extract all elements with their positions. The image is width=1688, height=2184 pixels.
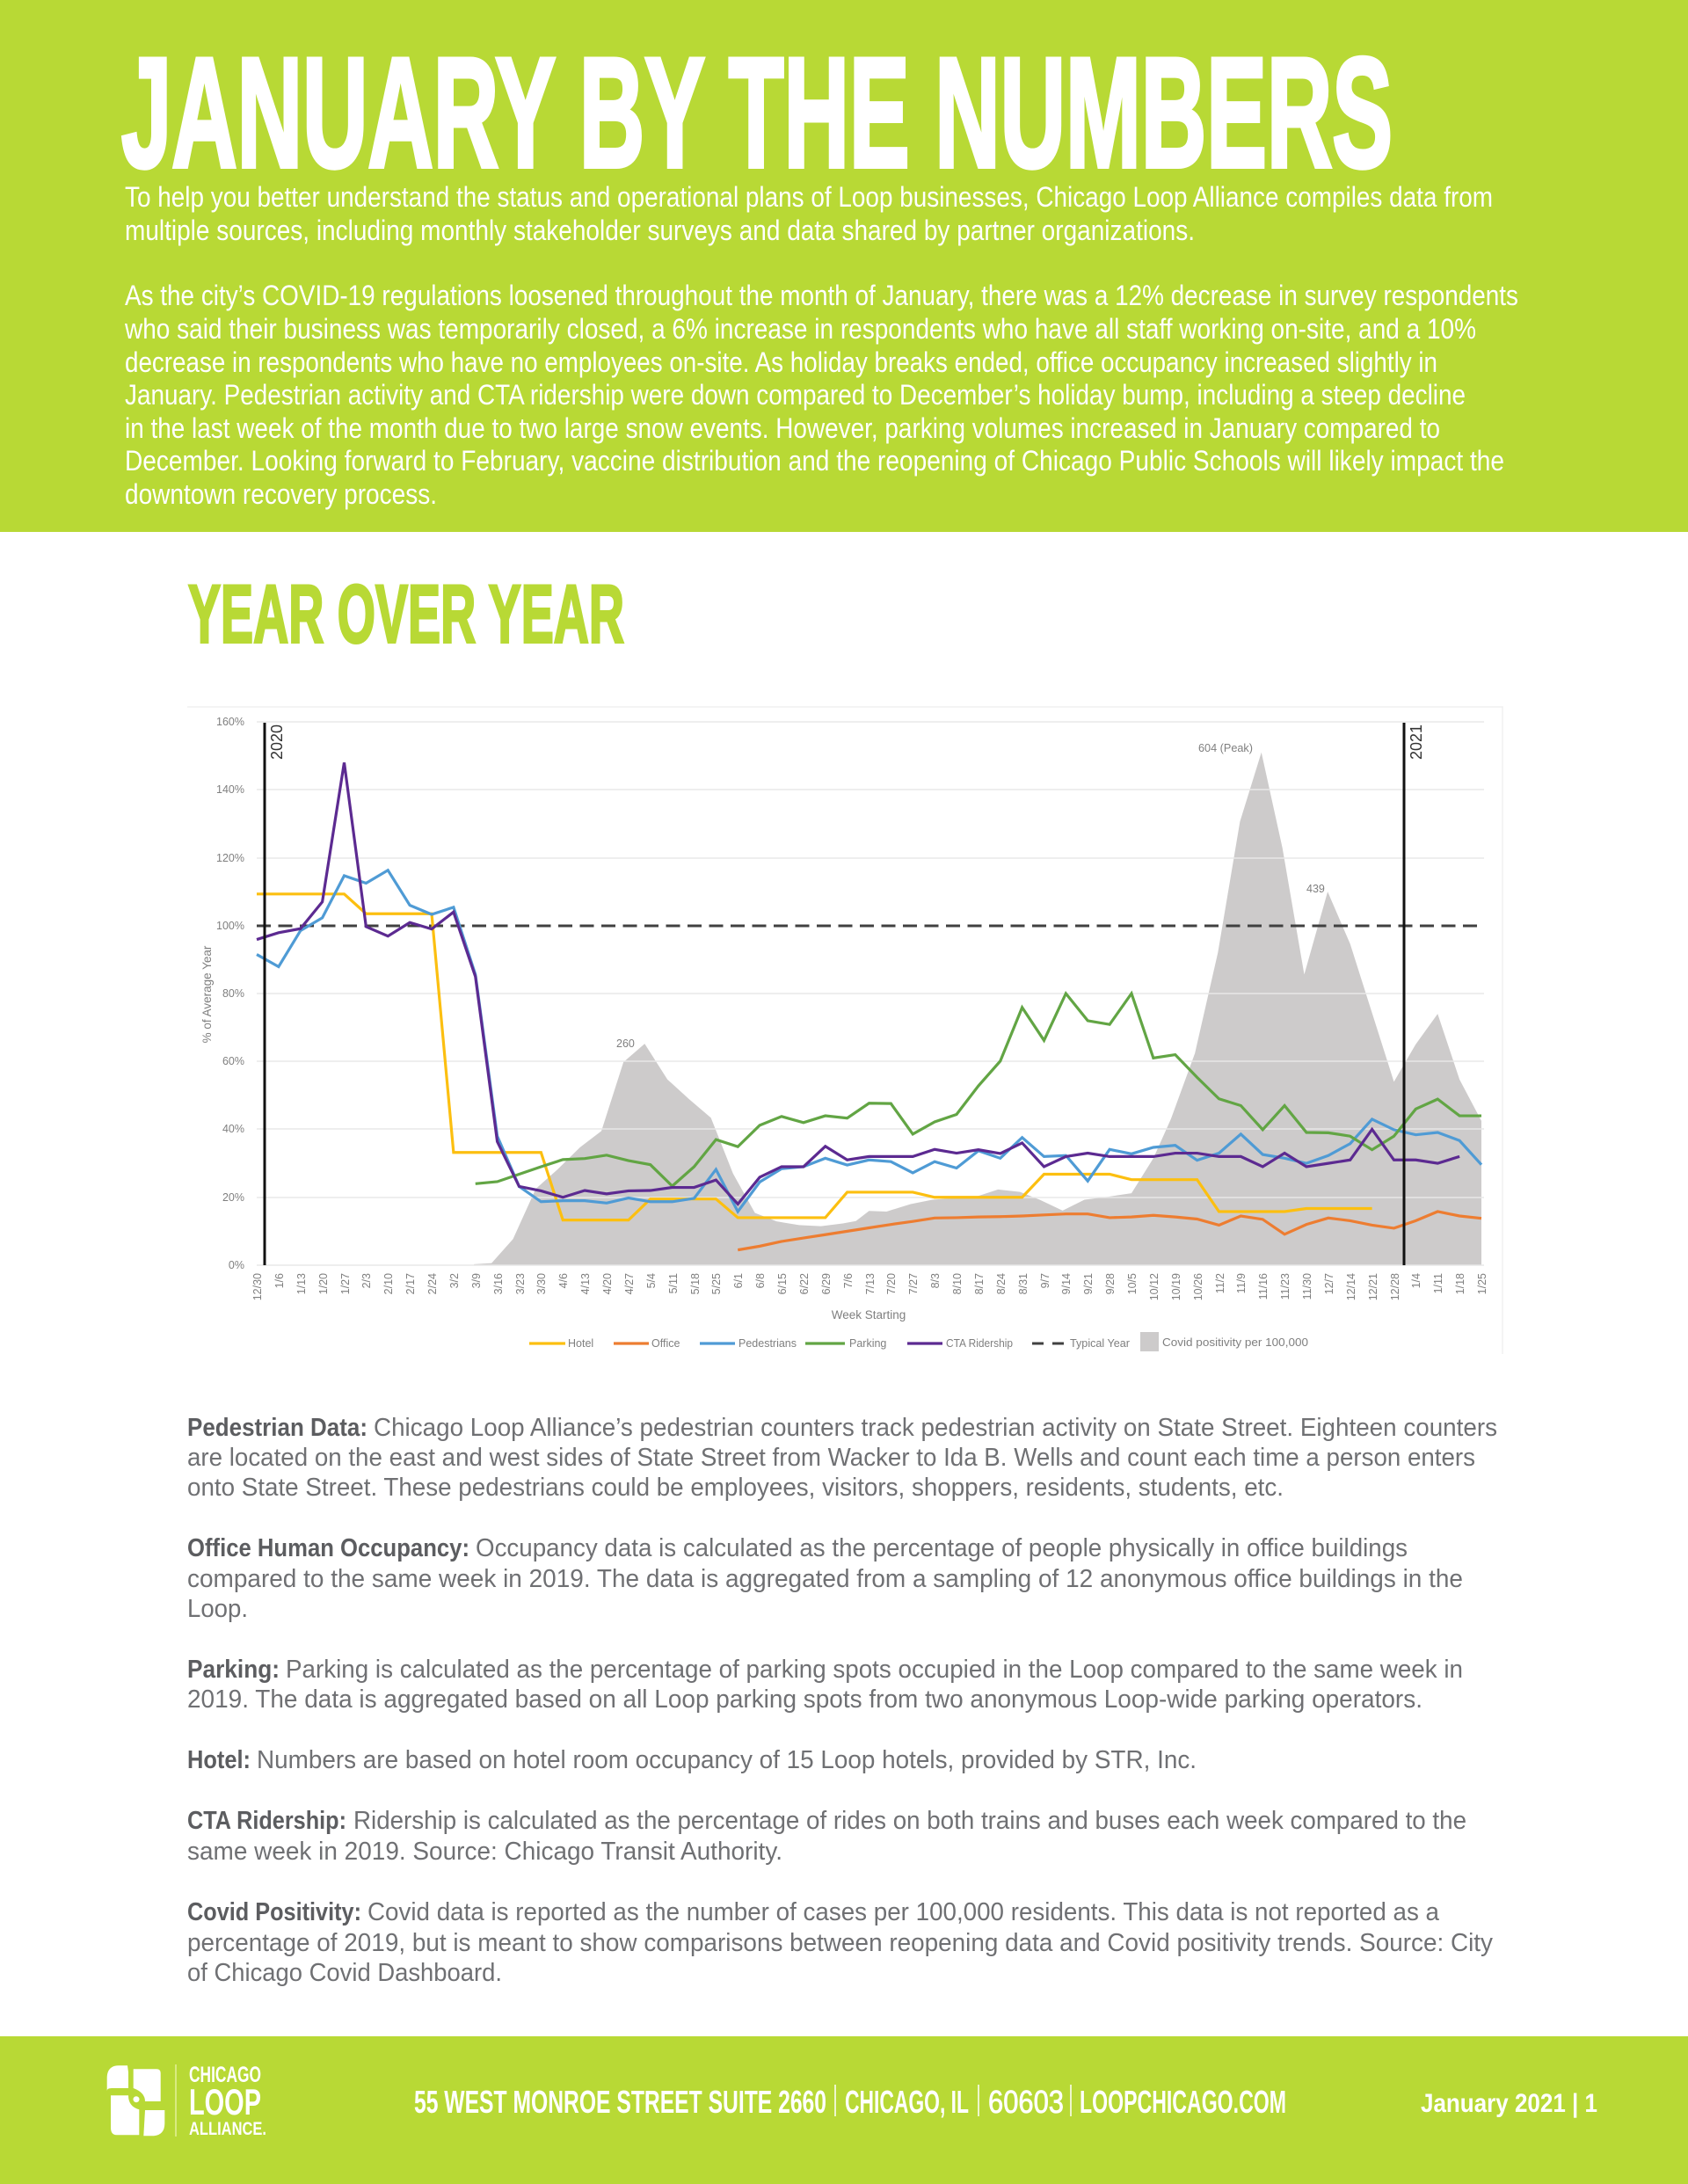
x axis labels: 11/9 <box>1235 1273 1248 1293</box>
x axis labels: 10/19 <box>1170 1273 1182 1300</box>
legend: Pedestrians <box>738 1337 797 1350</box>
page date and number: January 2021 | 1 <box>1421 2089 1597 2118</box>
note: office human occupancy: Occupancy data is calculated as the percentage of people physically in office buildings <box>476 1534 1408 1562</box>
x axis labels: 3/2 <box>448 1273 461 1288</box>
y axis labels: 140% <box>216 783 244 796</box>
note: pedestrian data <box>187 1414 1497 1502</box>
text block: introduction: multiple sources, including monthly stakeholder surveys and data shared by partner organizations. <box>125 215 1195 246</box>
note: covid positivity: of Chicago Covid Dashboard. <box>187 1959 502 1987</box>
x axis labels: 10/12 <box>1148 1273 1160 1300</box>
x axis labels: 8/3 <box>929 1273 942 1288</box>
note: office human occupancy: Office Human Occupancy: <box>187 1534 469 1562</box>
x axis labels: 11/23 <box>1279 1273 1291 1299</box>
note: office human occupancy <box>187 1534 1463 1623</box>
x axis labels: 2/17 <box>404 1273 417 1294</box>
legend: Office <box>651 1337 680 1350</box>
text block: introduction <box>124 181 1518 510</box>
note: pedestrian data: are located on the east and west sides of State Street from Wacker to Ida B. Wells and count each time a person enters <box>187 1444 1475 1472</box>
x axis labels: 9/7 <box>1039 1273 1051 1288</box>
x axis labels: 6/22 <box>798 1273 811 1294</box>
x axis labels: 6/8 <box>754 1273 767 1288</box>
x axis labels: 1/4 <box>1410 1273 1422 1288</box>
data lines <box>257 762 1481 1250</box>
x axis labels: 7/20 <box>885 1273 898 1294</box>
note: office human occupancy: Loop. <box>187 1595 248 1623</box>
icon: chicago loop alliance logo <box>107 2065 164 2136</box>
note: pedestrian data: Chicago Loop Alliance’s pedestrian counters track pedestrian activity on State Street. Eighteen counters <box>374 1414 1497 1442</box>
y axis labels <box>216 716 244 1271</box>
annotations: covid peaks: 260 <box>616 1037 635 1050</box>
note: CTA ridership <box>187 1807 1466 1866</box>
note: hotel: Hotel: <box>187 1746 251 1774</box>
x axis labels: 1/6 <box>273 1273 286 1288</box>
line: pedestrians <box>257 870 1481 1212</box>
legend: CTA Ridership <box>946 1337 1013 1350</box>
footer address: LOOPCHICAGO.COM <box>1080 2084 1286 2120</box>
x axis labels: 10/5 <box>1126 1273 1139 1294</box>
x axis labels: 1/27 <box>339 1273 352 1294</box>
note: pedestrian data: Pedestrian Data: <box>187 1414 367 1442</box>
x axis labels: 1/11 <box>1432 1273 1444 1293</box>
x axis labels: 8/31 <box>1017 1273 1030 1294</box>
line: hotel <box>257 894 1372 1220</box>
y axis labels: 60% <box>222 1055 244 1067</box>
x axis labels: 4/13 <box>579 1273 592 1294</box>
y axis labels: 100% <box>216 920 244 932</box>
text block: introduction: downtown recovery process. <box>125 478 437 510</box>
text block: introduction: To help you better understand the status and operational plans of Loop businesses, Chicago Loop Alliance compiles data from <box>125 181 1493 213</box>
x axis labels: 3/16 <box>492 1273 505 1294</box>
text block: introduction: December. Looking forward to February, vaccine distribution and the reopening of Chicago Public Schools will likely impact the <box>125 445 1504 477</box>
x axis labels: 12/21 <box>1367 1273 1379 1300</box>
x axis labels: 2/24 <box>426 1273 439 1294</box>
year marker: 2020: 2020 <box>268 724 286 760</box>
annotations: covid peaks <box>616 742 1325 1050</box>
note: CTA ridership: same week in 2019. Source: Chicago Transit Authority. <box>187 1838 782 1866</box>
x axis labels: 9/14 <box>1060 1273 1073 1294</box>
y axis labels: 120% <box>216 852 244 864</box>
x axis labels: 1/20 <box>317 1273 330 1294</box>
footer address: CHICAGO, IL <box>845 2084 969 2120</box>
note: CTA ridership: CTA Ridership: <box>187 1807 346 1835</box>
line: CTA ridership <box>257 762 1459 1204</box>
legend: Covid positivity per 100,000 <box>1162 1336 1308 1349</box>
logo wordmark: LOOP <box>189 2081 261 2122</box>
logo wordmark: CHICAGO <box>189 2063 261 2087</box>
footer address: 60603 <box>988 2084 1064 2120</box>
note: parking <box>187 1656 1463 1714</box>
note: covid positivity: Covid data is reported as the number of cases per 100,000 residents. This data is not reported as a <box>367 1898 1440 1926</box>
x axis labels: 4/20 <box>601 1273 614 1294</box>
note: parking: Parking: <box>187 1656 280 1684</box>
x axis labels: 3/30 <box>535 1273 548 1294</box>
text block: introduction: in the last week of the month due to two large snow events. However, parking volumes increased in January compared to <box>125 412 1440 444</box>
chart: year over year line and area chart <box>187 707 1502 1354</box>
note: parking: 2019. The data is aggregated based on all Loop parking spots from two anonymous Loop-wide parking operators. <box>187 1685 1422 1714</box>
x axis labels: 5/4 <box>645 1273 658 1288</box>
note: covid positivity <box>187 1898 1493 1987</box>
x axis labels: 8/10 <box>951 1273 964 1294</box>
footer address: 55 WEST MONROE STREET SUITE 2660 <box>414 2084 826 2120</box>
x axis labels: 2/10 <box>382 1273 395 1294</box>
logo wordmark: ALLIANCE. <box>189 2119 266 2139</box>
text block: data source notes <box>187 1414 1497 1987</box>
panel: header band <box>0 0 1688 532</box>
footer address <box>414 2084 1286 2120</box>
x axis title: Week Starting <box>832 1308 906 1321</box>
x axis labels: 11/2 <box>1214 1273 1226 1293</box>
text block: introduction: decrease in respondents who have no employees on-site. As holiday breaks ended, office occupancy increased slightly in <box>125 346 1437 378</box>
year marker: 2021: 2021 <box>1408 724 1425 760</box>
x axis labels: 8/17 <box>973 1273 986 1294</box>
line: office <box>738 1212 1481 1250</box>
x axis labels: 12/14 <box>1345 1273 1357 1300</box>
x axis labels: 11/16 <box>1257 1273 1270 1299</box>
x axis labels: 7/27 <box>907 1273 920 1294</box>
text block: introduction: January. Pedestrian activity and CTA ridership were down compared to December’s holiday bump, including a steep decline <box>125 379 1466 411</box>
y axis labels: 160% <box>216 716 244 728</box>
x axis labels: 5/25 <box>710 1273 723 1294</box>
note: covid positivity: percentage of 2019, but is meant to show comparisons between reopening data and Covid positivity trends. Source: City <box>187 1929 1493 1957</box>
x axis labels: 1/13 <box>295 1273 308 1294</box>
logo divider <box>175 2064 177 2137</box>
line: typical year dashed <box>257 925 1482 927</box>
note: pedestrian data: onto State Street. These pedestrians could be employees, visitors, shoppers, residents, students, etc. <box>187 1474 1284 1502</box>
x axis labels: 9/28 <box>1104 1273 1117 1294</box>
text block: introduction: As the city’s COVID-19 regulations loosened throughout the month of January, there was a 12% decrease in survey respondents <box>125 280 1518 311</box>
x axis labels: 4/6 <box>557 1273 570 1288</box>
x axis labels: 1/18 <box>1454 1273 1466 1294</box>
legend <box>529 1332 1308 1351</box>
note: hotel: Numbers are based on hotel room occupancy of 15 Loop hotels, provided by STR, Inc. <box>257 1746 1197 1774</box>
note: CTA ridership: Ridership is calculated as the percentage of rides on both trains and buses each week compared to the <box>353 1807 1466 1835</box>
x axis labels: 4/27 <box>623 1273 636 1294</box>
note: covid positivity: Covid Positivity: <box>187 1898 361 1926</box>
y axis labels: 0% <box>229 1259 244 1271</box>
note: parking: Parking is calculated as the percentage of parking spots occupied in the Loop compared to the same week in <box>286 1656 1463 1684</box>
grid lines <box>257 722 1484 1265</box>
x axis labels: 5/18 <box>689 1273 702 1294</box>
x axis labels: 5/11 <box>667 1273 680 1293</box>
x axis labels: 8/24 <box>995 1273 1008 1294</box>
x axis labels: 6/15 <box>776 1273 789 1294</box>
x axis labels: 6/29 <box>820 1273 833 1294</box>
legend: Hotel <box>568 1337 593 1350</box>
heading: year over year: YEAR OVER YEAR <box>188 568 624 659</box>
annotations: covid peaks: 439 <box>1306 883 1325 895</box>
text block: introduction: who said their business was temporarily closed, a 6% increase in respondents who have all staff working on-site, and a 10% <box>124 313 1476 345</box>
x axis labels <box>251 1273 1488 1300</box>
y axis labels: 20% <box>222 1191 244 1204</box>
x axis labels: 12/28 <box>1389 1273 1401 1300</box>
x axis labels: 9/21 <box>1082 1273 1095 1294</box>
x axis labels: 3/23 <box>514 1273 527 1294</box>
x axis labels: 7/13 <box>864 1273 877 1294</box>
logo wordmark <box>189 2063 266 2139</box>
x axis labels: 7/6 <box>842 1273 855 1288</box>
y axis labels: 80% <box>222 987 244 1000</box>
x axis labels: 1/25 <box>1476 1273 1488 1294</box>
x axis labels: 10/26 <box>1192 1273 1204 1300</box>
x axis labels: 3/9 <box>470 1273 483 1288</box>
y axis labels: 40% <box>222 1123 244 1135</box>
x axis labels: 12/7 <box>1323 1273 1335 1294</box>
annotations: covid peaks: 604 (Peak) <box>1198 742 1253 754</box>
x axis labels: 12/30 <box>251 1273 264 1300</box>
area: covid positivity <box>474 753 1481 1265</box>
legend: Parking <box>849 1337 886 1350</box>
x axis labels: 11/30 <box>1301 1273 1313 1299</box>
y axis title: % of Average Year <box>200 945 214 1043</box>
line: parking <box>476 994 1481 1186</box>
legend: Typical Year <box>1070 1337 1130 1350</box>
note: office human occupancy: compared to the same week in 2019. The data is aggregated from a sampling of 12 anonymous office buildings in the <box>187 1565 1463 1593</box>
panel: footer band <box>0 2036 1688 2184</box>
x axis labels: 2/3 <box>360 1273 373 1288</box>
x axis labels: 6/1 <box>732 1273 745 1288</box>
